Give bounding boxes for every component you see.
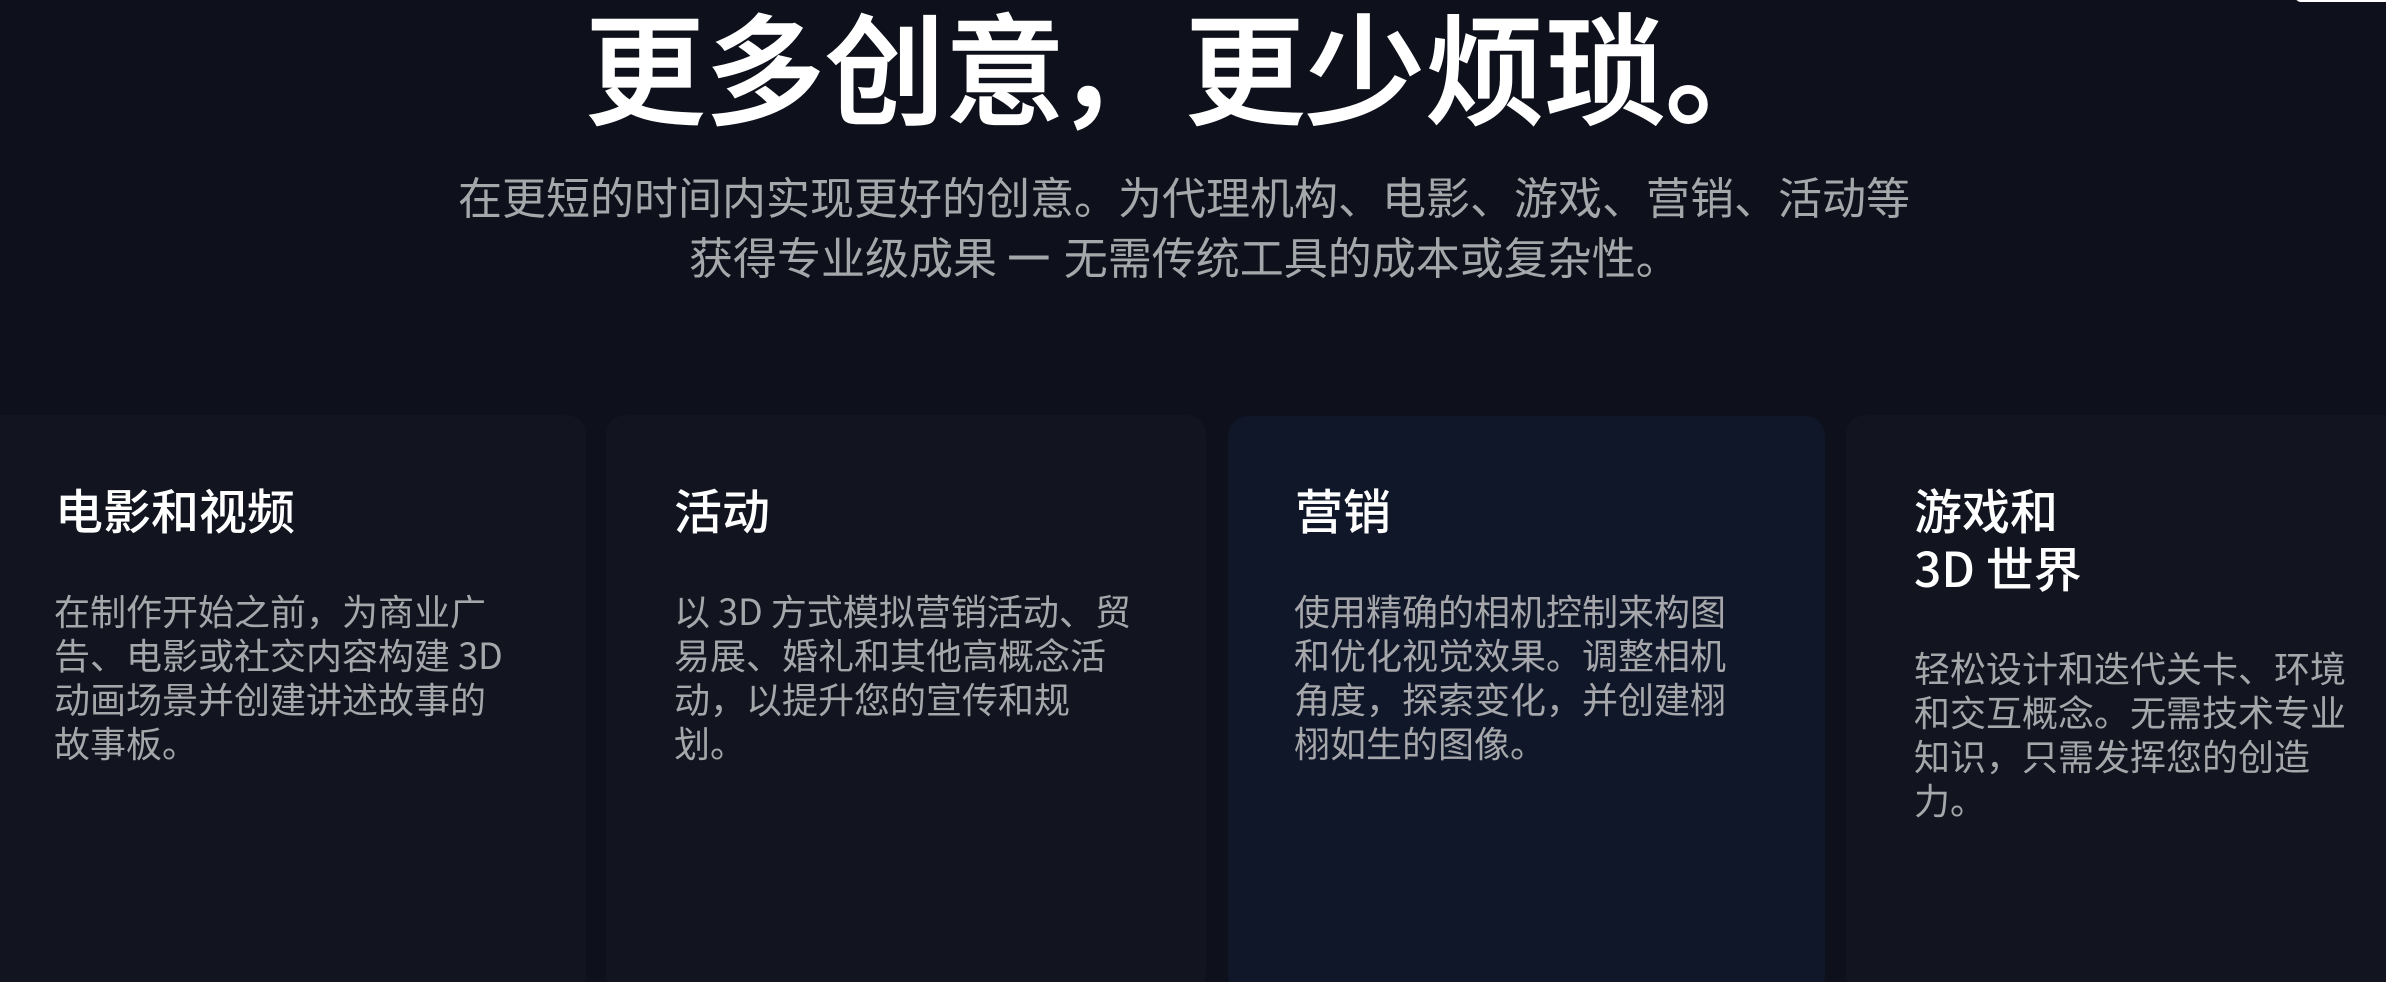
- text: events description: 易展、婚礼和其他高概念活: [674, 628, 1106, 680]
- heading: events: 活动: [674, 473, 770, 543]
- text: games and 3D worlds description: 和交互概念。无需技术专业: [1914, 685, 2346, 737]
- text: events description: [674, 584, 1131, 768]
- subtitle: 在更短的时间内实现更好的创意。为代理机构、电影、游戏、营销、活动等: [458, 163, 1910, 227]
- text: events description: 以 3D 方式模拟营销活动、贸: [674, 584, 1131, 636]
- subtitle: 获得专业级成果 — 无需传统工具的成本或复杂性。: [689, 223, 1680, 287]
- subtitle: [458, 163, 1910, 287]
- heading: games and 3D worlds: [1914, 473, 2082, 601]
- text: film and video description: 告、电影或社交内容构建 3D: [54, 628, 503, 680]
- top right white tab: [2295, 0, 2386, 2]
- text: games and 3D worlds description: 力。: [1914, 773, 1986, 825]
- text: games and 3D worlds description: 知识，只需发挥您的创造: [1914, 729, 2310, 781]
- text: marketing description: 使用精确的相机控制来构图: [1294, 584, 1726, 636]
- text: marketing description: [1294, 584, 1726, 768]
- text: games and 3D worlds description: 轻松设计和迭代关卡、环境: [1914, 641, 2346, 693]
- panel: events: [606, 415, 1206, 982]
- heading: games and 3D worlds: 3D 世界: [1914, 531, 2082, 601]
- text: events description: 动，以提升您的宣传和规: [674, 672, 1070, 724]
- panel: games and 3D worlds: [1846, 415, 2386, 982]
- heading: film and video: 电影和视频: [55, 473, 295, 543]
- text: marketing description: 和优化视觉效果。调整相机: [1294, 628, 1726, 680]
- panel: marketing: [1228, 416, 1825, 982]
- text: film and video description: [54, 584, 503, 768]
- text: events description: 划。: [674, 716, 746, 768]
- heading: marketing: 营销: [1295, 473, 1391, 543]
- heading: games and 3D worlds: 游戏和: [1914, 473, 2058, 543]
- text: games and 3D worlds description: [1914, 641, 2346, 825]
- text: marketing description: 角度，探索变化，并创建栩: [1294, 672, 1726, 724]
- text: marketing description: 栩如生的图像。: [1294, 716, 1546, 768]
- panel: film and video: [0, 415, 586, 982]
- text: film and video description: 故事板。: [54, 716, 198, 768]
- text: film and video description: 动画场景并创建讲述故事的: [54, 672, 486, 724]
- text: film and video description: 在制作开始之前，为商业广: [54, 584, 486, 636]
